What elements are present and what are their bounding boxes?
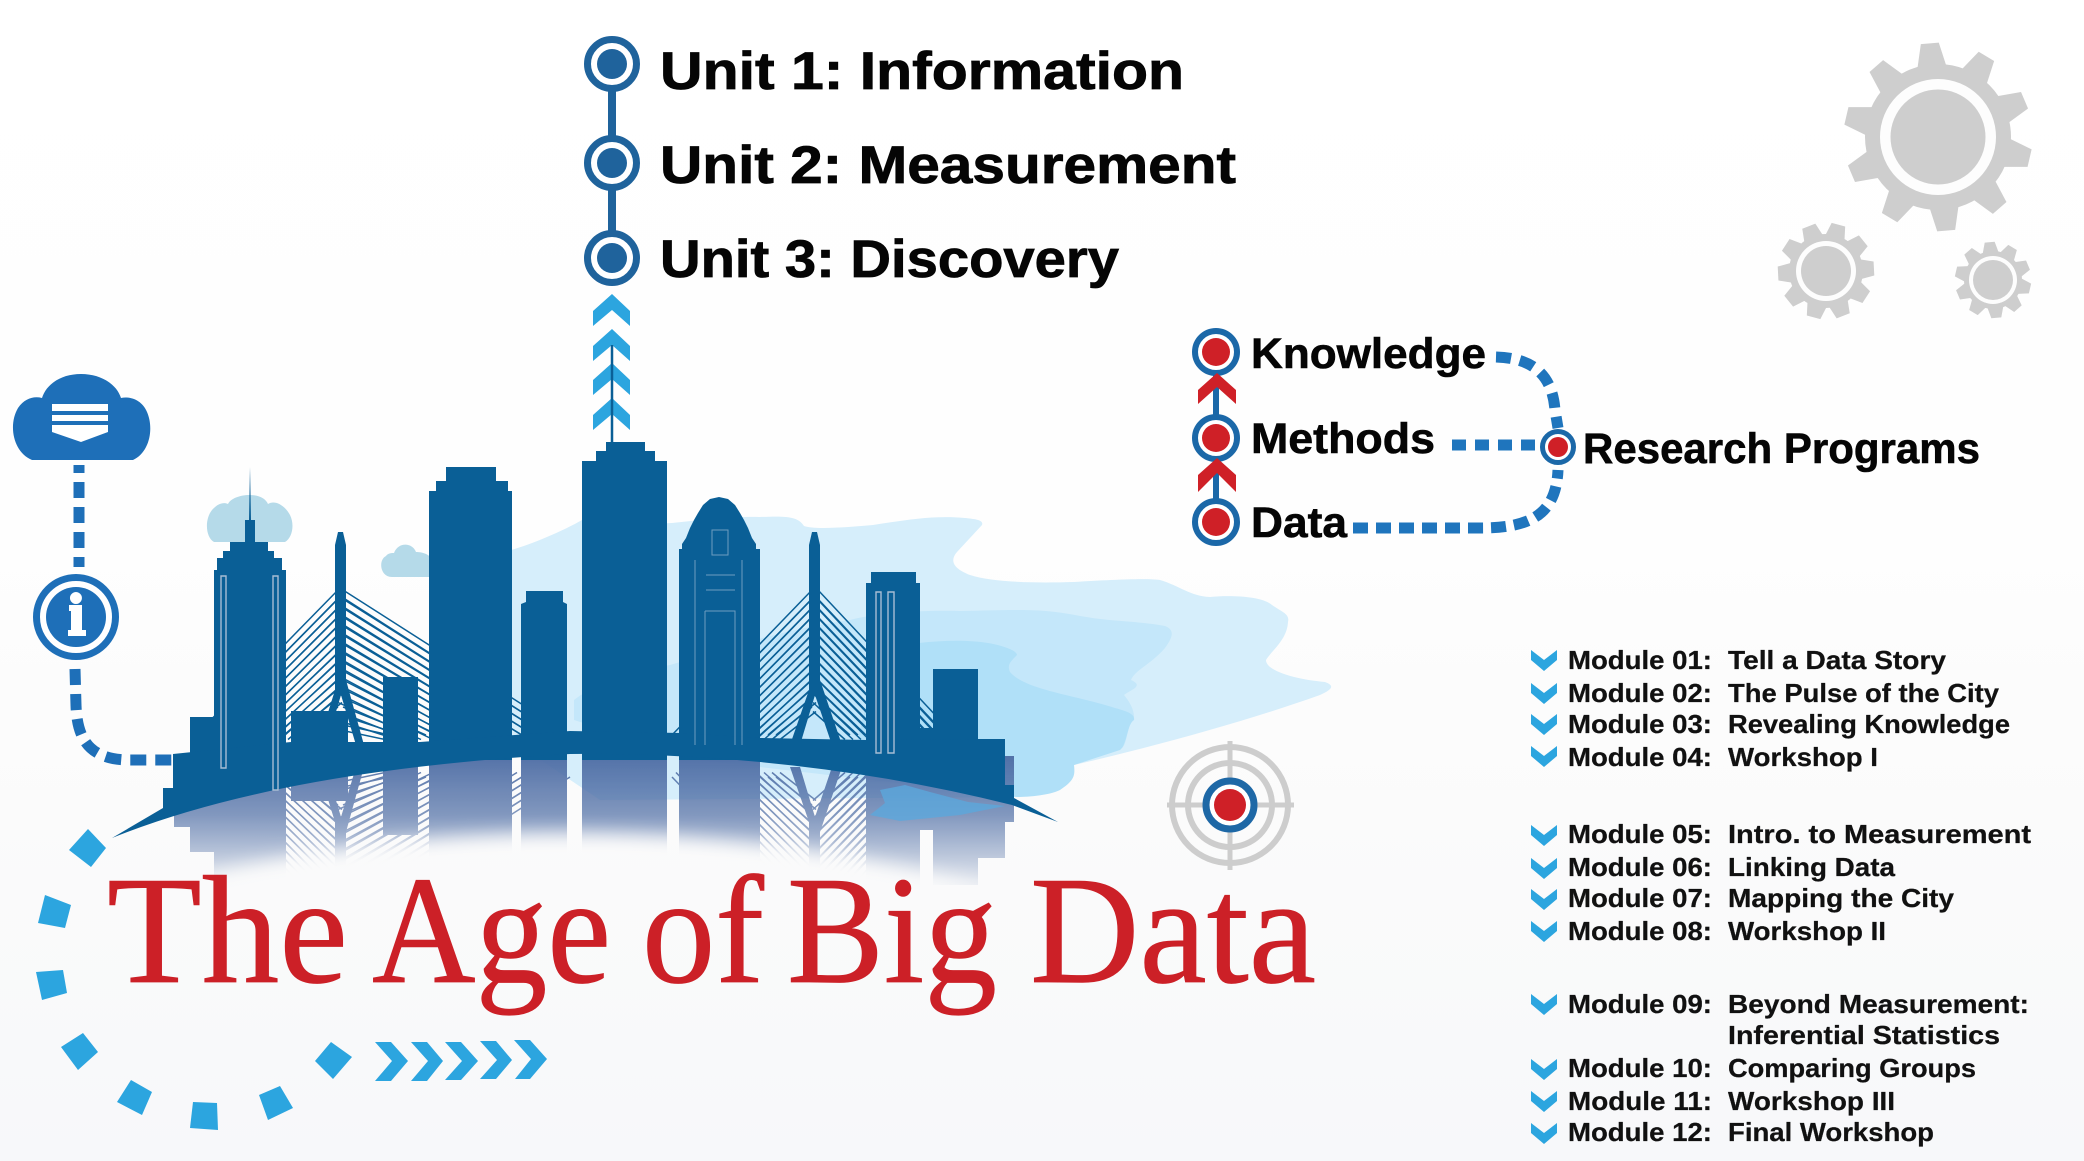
unit 1 label: Unit 1: Information (660, 42, 1184, 101)
module text: Module 03: (1568, 709, 1712, 739)
module text: Linking Data (1728, 852, 1896, 882)
dashed link: methods (1452, 440, 1541, 450)
medium gear (1778, 222, 1874, 320)
unit timeline (588, 40, 1236, 289)
module text: Inferential Statistics (1728, 1020, 2000, 1050)
module text: Tell a Data Story (1728, 645, 1947, 675)
data label: Data (1251, 499, 1348, 547)
module text: Module 12: (1568, 1117, 1712, 1147)
dashed circle of blue squares (36, 829, 352, 1130)
module text: Mapping the City (1728, 883, 1955, 913)
base steps (163, 717, 220, 808)
module text: Module 09: (1568, 989, 1712, 1019)
unit 3 label: Unit 3: Discovery (660, 230, 1120, 289)
water map behind skyline (511, 517, 1331, 800)
research programs label: Research Programs (1583, 425, 1980, 473)
icon: target (1167, 741, 1294, 870)
skyline reflection (174, 756, 1014, 885)
module text: Module 10: (1568, 1053, 1712, 1083)
module text: Module 06: (1568, 852, 1712, 882)
module text: Final Workshop (1728, 1117, 1934, 1147)
knowledge label: Knowledge (1251, 330, 1486, 378)
city skyline (112, 442, 1058, 838)
small gear (1954, 241, 2032, 319)
dashed link: knowledge (1496, 357, 1558, 428)
red chevron 2 (1198, 458, 1236, 492)
curved ground arc (112, 731, 1058, 838)
title (107, 846, 1316, 1016)
unit 3 node (588, 234, 636, 282)
title: Data (1030, 846, 1316, 1016)
module text (1568, 645, 2031, 1147)
module text: Module 01: (1568, 645, 1712, 675)
rightward chevrons (375, 1040, 547, 1081)
red chevron 1 (1198, 373, 1236, 404)
module text: Workshop III (1728, 1086, 1895, 1116)
module text: The Pulse of the City (1728, 678, 2000, 708)
module text: Comparing Groups (1728, 1053, 1976, 1083)
module text: Intro. to Measurement (1728, 819, 2031, 849)
module text: Module 08: (1568, 916, 1712, 946)
module text: Revealing Knowledge (1728, 709, 2010, 739)
module text: Beyond Measurement: (1728, 989, 2029, 1019)
module text: Module 11: (1568, 1086, 1712, 1116)
methods node (1195, 417, 1237, 459)
module text: Module 04: (1568, 742, 1712, 772)
module chevrons (1531, 650, 1557, 1144)
tower window lines (221, 576, 894, 790)
unit 1 node (588, 40, 636, 88)
module list (1531, 645, 2031, 1147)
module text: Module 02: (1568, 678, 1712, 708)
title: The (107, 846, 348, 1016)
icon: cloud download (13, 374, 150, 460)
title: of (642, 846, 765, 1016)
research programs node (1542, 432, 1574, 462)
upward chevrons (593, 294, 630, 442)
methods label: Methods (1251, 415, 1435, 463)
module text: Module 05: (1568, 819, 1712, 849)
icon: gears (1778, 42, 2033, 320)
dashed link: data (1353, 470, 1558, 528)
research programs diagram (1195, 330, 1980, 547)
data node (1195, 501, 1237, 543)
large gear (1843, 42, 2033, 232)
water reflection patch (870, 785, 1005, 821)
knowledge node (1195, 331, 1237, 373)
module text: Workshop I (1728, 742, 1878, 772)
module text: Module 07: (1568, 883, 1712, 913)
unit 2 node (588, 138, 636, 188)
unit 2 label: Unit 2: Measurement (660, 136, 1236, 195)
icon: info circle (36, 578, 116, 656)
dashed connector: info to skyline (75, 669, 173, 760)
title: Age (372, 846, 611, 1016)
clouds behind skyline (207, 495, 432, 577)
dashed connector: cloud to info (74, 465, 84, 567)
title: Big (787, 846, 997, 1016)
module text: Workshop II (1728, 916, 1886, 946)
